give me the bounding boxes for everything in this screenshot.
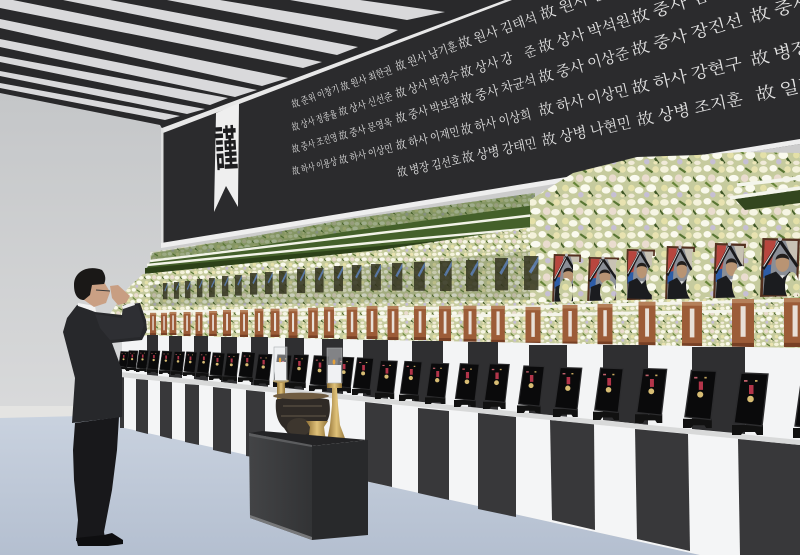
flowers overlapping portraits (559, 248, 799, 310)
names of the fallen: 故 원사 김태석 (456, 9, 539, 52)
names of the fallen: 故 병장 김선호 (396, 152, 463, 180)
names of the fallen: 故 상사 박경수 (393, 67, 461, 101)
medal plaques (118, 350, 800, 438)
middle flower tier (107, 226, 540, 346)
lower flower band with white garlands (112, 296, 800, 350)
names of the fallen: 故 상병 나현민 (540, 113, 633, 150)
floor (0, 415, 700, 555)
main flower mass (530, 152, 800, 347)
names of the fallen: 故 하사 이재민 (394, 123, 461, 153)
right candle (327, 348, 346, 441)
names of the fallen: 故 원사 최한권 (339, 64, 394, 94)
names of the fallen: 故 하사 이상희 (459, 106, 533, 138)
suit jacket (63, 303, 147, 423)
pennant with character: 謹 (213, 109, 239, 181)
hair (74, 268, 105, 300)
names of the fallen: 故 중사 문영욱 (337, 115, 394, 143)
small brass cup (306, 421, 328, 442)
names of the fallen: 故 중사 박보람 (394, 93, 462, 126)
trousers (73, 417, 119, 541)
altar box (249, 431, 368, 540)
names of the fallen: 故 하사 강현구 (630, 53, 744, 98)
names of the fallen: 故 상병 조지훈 (635, 89, 745, 130)
names of the fallen: 故 준위 이창기 (290, 82, 341, 111)
names of the fallen: 故 하사 이용상 (291, 155, 339, 178)
names of the fallen: 故 하사 이상민 (537, 81, 630, 120)
names of the fallen: 故 중사 조진영 (290, 131, 339, 156)
names of the fallen: 故 상사 신선준 (337, 90, 394, 119)
names of the fallen: 故 원사 남기훈 (393, 38, 460, 74)
shoes (76, 533, 123, 546)
wooden name tablets (150, 298, 800, 347)
lower black and white frieze (120, 377, 800, 555)
names of the fallen: 故 중사 차균석 (458, 71, 538, 108)
names of the fallen: 故 중사 이상준 (536, 44, 632, 87)
pennant with character (213, 103, 239, 212)
man saluting (63, 268, 147, 546)
left candle (273, 347, 289, 410)
right side garlands (730, 178, 800, 210)
glasses (96, 290, 110, 291)
shelf top (120, 372, 800, 445)
saluting hand (110, 285, 130, 305)
small portraits row (163, 256, 538, 299)
names of the fallen: 故 상사 박석원 (536, 11, 633, 57)
names of the fallen: 故 중사 장진선 (629, 10, 745, 60)
arm highlight (95, 305, 144, 340)
names of the fallen: 故 상병 강태민 (460, 134, 538, 166)
striped ceiling (0, 0, 510, 130)
back wall (0, 90, 170, 420)
names of the fallen: 故 상사 강 준 (458, 42, 538, 81)
black memorial banner (161, 0, 800, 248)
face (84, 282, 110, 307)
upper frieze black columns (147, 335, 745, 434)
names of the fallen (290, 0, 800, 180)
upper frieze white background (122, 335, 800, 445)
upper green garland tier (145, 193, 535, 274)
bronze incense burner (273, 393, 330, 437)
names of the fallen: 故 상사 정종율 (290, 107, 339, 134)
large portraits row (552, 237, 800, 307)
shirt collar and cuff (78, 303, 96, 312)
names of the fallen: 故 하사 이상민 (338, 142, 394, 167)
